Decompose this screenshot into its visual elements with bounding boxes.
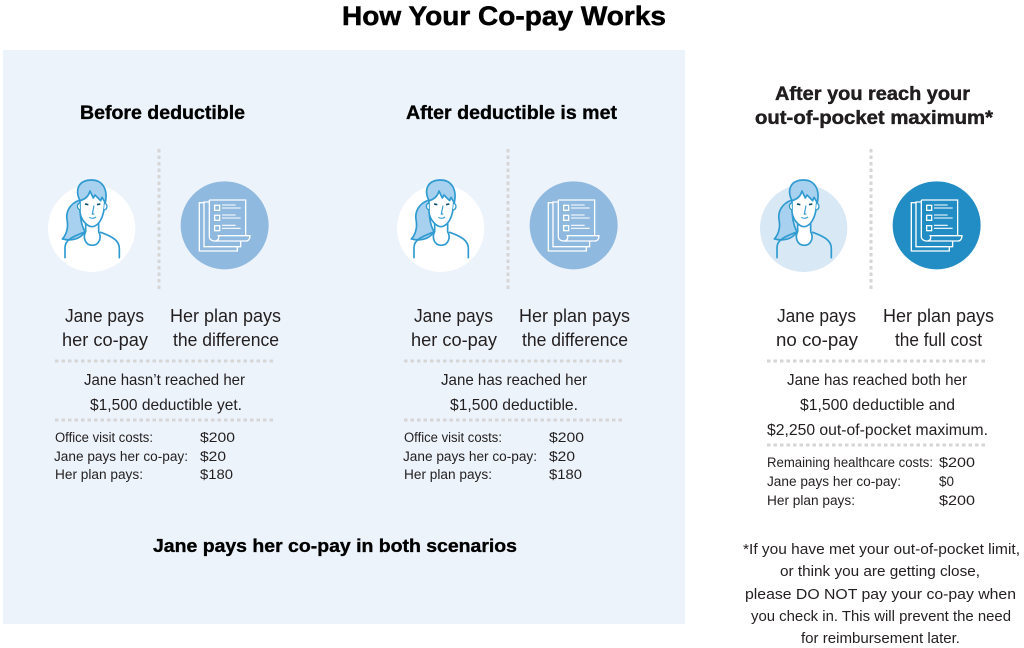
cost table: Her plan pays:	[767, 493, 855, 508]
status text: Jane has reached her	[441, 372, 588, 389]
status text: Jane has reached both her	[787, 372, 968, 389]
cost table: Her plan pays:	[55, 467, 143, 482]
label: plan pays full cost: Her plan pays	[883, 306, 994, 326]
cost table: $180	[200, 467, 233, 482]
cost table	[767, 455, 975, 508]
cost table: $0	[939, 474, 954, 489]
icon: plan documents	[893, 181, 981, 269]
label: plan pays full cost: the full cost	[895, 330, 982, 350]
icon: Jane	[48, 180, 135, 272]
label: Jane pays: her co-pay	[411, 330, 497, 350]
label: plan pays: the difference	[522, 330, 628, 350]
label: plan pays	[170, 306, 281, 350]
cost table: $200	[939, 455, 975, 470]
cost table: Remaining healthcare costs:	[767, 455, 933, 470]
cost table	[403, 430, 584, 482]
label: plan pays full cost	[883, 306, 994, 350]
label: Jane pays: Jane pays	[414, 306, 493, 326]
heading: after out-of-pocket maximum	[755, 84, 994, 129]
cost table: $20	[549, 449, 575, 464]
icon: Jane	[397, 180, 484, 272]
cost table: Jane pays her co-pay:	[54, 449, 188, 464]
status text: $1,500 deductible and	[800, 397, 955, 414]
footnote: or think you are getting close,	[780, 563, 980, 580]
label: plan pays: Her plan pays	[170, 306, 281, 326]
label: Jane pays: Jane pays	[65, 306, 144, 326]
cost table	[54, 430, 235, 482]
title: How Your Co-pay Works	[342, 1, 666, 31]
status text: $1,500 deductible.	[450, 397, 578, 414]
divider between payers	[506, 149, 510, 290]
panel: after out-of-pocket maximum	[743, 84, 1020, 647]
cost table: Her plan pays:	[404, 467, 492, 482]
label: Jane pays	[411, 306, 497, 350]
cost table: Jane pays her co-pay:	[403, 449, 537, 464]
status text	[767, 372, 988, 439]
status text: $1,500 deductible yet.	[90, 397, 242, 414]
status text: $2,250 out-of-pocket maximum.	[767, 422, 988, 439]
footnote	[743, 541, 1020, 647]
cost table: $20	[200, 449, 226, 464]
label: plan pays: Her plan pays	[519, 306, 630, 326]
status text: Jane hasn’t reached her	[84, 372, 246, 389]
cost table: Office visit costs:	[55, 430, 153, 445]
footnote: *If you have met your out-of-pocket limit,	[743, 541, 1020, 558]
divider between payers	[158, 149, 160, 290]
status text	[441, 372, 588, 414]
cost table: Jane pays her co-pay:	[767, 474, 901, 489]
panel: before deductible	[48, 103, 281, 482]
heading: after deductible: After deductible is met	[406, 103, 618, 124]
label: plan pays: the difference	[173, 330, 279, 350]
label: Jane pays no co-pay: Jane pays	[777, 306, 856, 326]
cost table: $200	[939, 493, 975, 508]
icon: Jane	[760, 180, 847, 272]
footnote: for reimbursement later.	[801, 630, 960, 647]
icon: plan documents	[181, 181, 269, 269]
heading: before deductible: Before deductible	[80, 103, 245, 124]
label: Jane pays no co-pay: no co-pay	[776, 330, 858, 350]
label: Jane pays no co-pay	[776, 306, 858, 350]
panel: after deductible is met	[397, 103, 630, 482]
status text	[84, 372, 246, 414]
cost table: $200	[200, 430, 235, 445]
panel: before and after deductible background	[3, 50, 685, 624]
cost table: $180	[549, 467, 582, 482]
cost table: $200	[549, 430, 584, 445]
heading: after out-of-pocket maximum: After you reach your	[775, 84, 971, 105]
label: Jane pays	[62, 306, 148, 350]
heading: after out-of-pocket maximum: out-of-pocket maximum*	[755, 108, 994, 129]
label: plan pays	[519, 306, 630, 350]
label: Jane pays: her co-pay	[62, 330, 148, 350]
panel summary statement: Jane pays her co-pay in both scenarios	[153, 536, 517, 556]
divider between payers	[870, 149, 872, 290]
cost table: Office visit costs:	[404, 430, 502, 445]
footnote: please DO NOT pay your co-pay when	[745, 586, 1016, 603]
icon: plan documents	[530, 181, 618, 269]
footnote: you check in. This will prevent the need	[751, 608, 1011, 625]
